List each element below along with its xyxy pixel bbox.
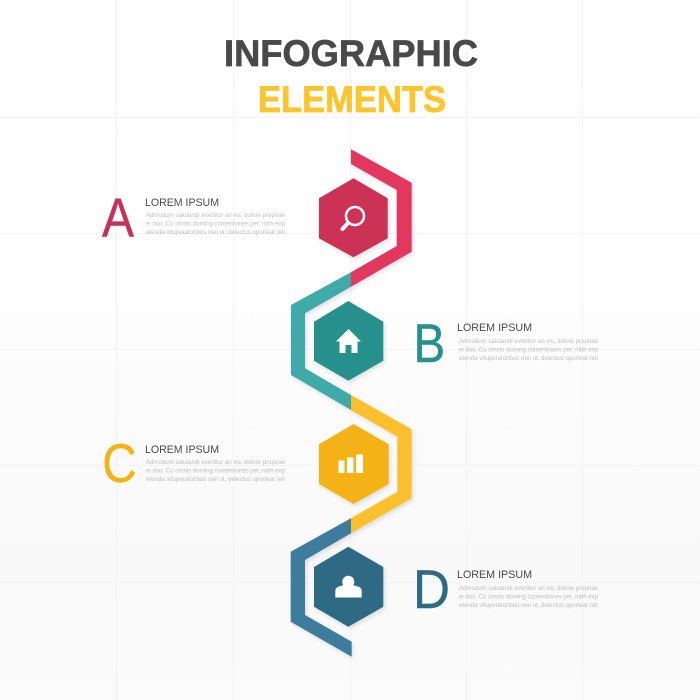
- text block A: ei duo. Cu omnis doming contentiones per, nibh exp: [146, 220, 285, 228]
- band: yellow segment: [351, 395, 412, 533]
- title: INFOGRAPHIC: [224, 33, 478, 74]
- icon: magnifier: [342, 207, 364, 229]
- text block B: etenda vituperatoribus mei ut, delectus oporteat reti: [459, 355, 598, 362]
- text block D: D: [413, 558, 450, 620]
- icon: person: [335, 576, 362, 598]
- hexagon B with home icon: [314, 301, 383, 381]
- hexagon C with bar chart icon: [319, 424, 389, 504]
- band: red segment: [351, 149, 412, 287]
- band: teal segment: [291, 272, 351, 410]
- text block D: [413, 558, 598, 620]
- band: blue segment: [291, 518, 352, 657]
- text block C: C: [102, 432, 137, 494]
- text block B: B: [414, 312, 445, 374]
- text block C: Admodum salutandi evertitur an vis, dolore propriae: [146, 459, 285, 466]
- text block A: etenda vituperatoribus mei ut, delectus oporteat reti: [146, 229, 285, 236]
- hexagon A with search icon: [319, 178, 388, 257]
- text block C: [102, 432, 285, 494]
- hexagon D with user icon: [314, 547, 383, 627]
- text block D: ei duo. Cu omnis doming contentiones per, nibh exp: [459, 594, 598, 600]
- icon: house: [336, 329, 361, 353]
- text block D: Admodum salutandi evertitur an vis, dolore propriae: [459, 585, 598, 592]
- text block A: LOREM IPSUM: [145, 197, 219, 209]
- text block D: etenda vituperatoribus mei ut, delectus oporteat reti: [459, 602, 598, 609]
- text block C: etenda vituperatoribus mei ut, delectus oporteat reti: [146, 476, 285, 483]
- text block B: [414, 312, 598, 374]
- text block A: Admodum salutandi evertitur an vis, dolore propriae: [146, 212, 285, 219]
- title: [224, 33, 478, 120]
- text block A: A: [102, 186, 134, 248]
- text block B: LOREM IPSUM: [457, 322, 532, 334]
- icon: bars: [338, 454, 363, 473]
- text block A: [102, 186, 285, 248]
- text block C: LOREM IPSUM: [145, 444, 219, 456]
- title: ELEMENTS: [258, 79, 446, 120]
- text block D: LOREM IPSUM: [457, 569, 532, 581]
- text block B: ei duo. Cu omnis doming contentiones per, nibh exp: [459, 346, 598, 354]
- text block C: ei duo. Cu omnis doming contentiones per, nibh exp: [146, 468, 285, 474]
- text block B: Admodum salutandi evertitur an vis, dolore propriae: [459, 338, 598, 345]
